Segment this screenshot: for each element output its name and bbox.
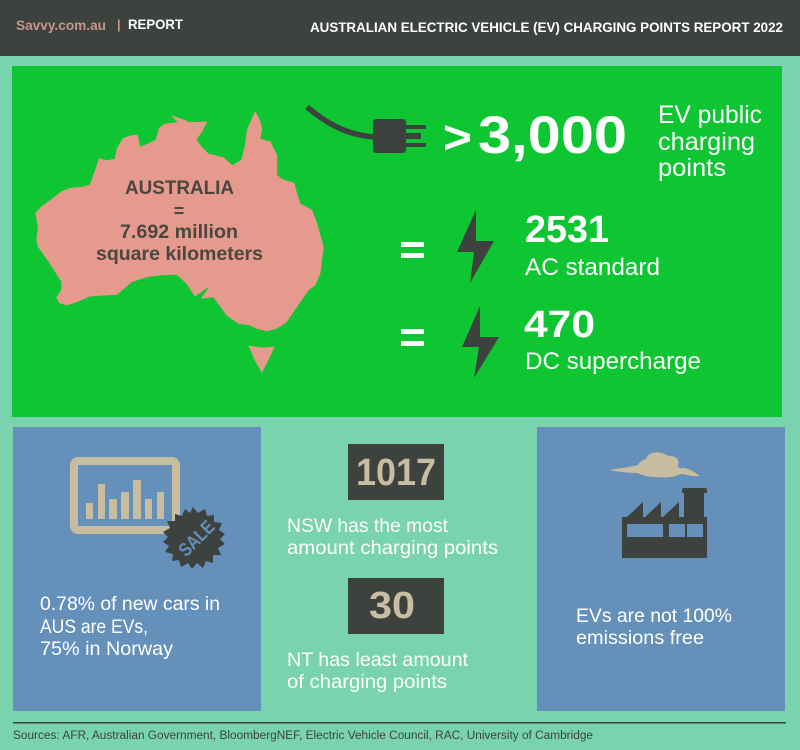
text: Australia area xyxy=(96,178,263,265)
text: EV public charging points: points xyxy=(658,154,726,182)
text: sources: Sources: AFR, Australian Government, BloombergNEF, Electric Vehicle Council, RAC, University of Cambridge xyxy=(13,730,593,742)
row: DC supercharge: 470 xyxy=(524,304,595,346)
header bar: AUSTRALIAN ELECTRIC VEHICLE (EV) CHARGING POINTS REPORT 2022 xyxy=(310,20,783,35)
panel: emissions xyxy=(537,427,785,711)
header bar: | xyxy=(117,17,121,32)
icon: chart on screen xyxy=(74,461,176,530)
stat: NT least charging points xyxy=(287,578,469,693)
stat: NSW most charging points xyxy=(287,444,498,559)
panel: charging points overview xyxy=(12,66,782,417)
stat: over 3,000: > xyxy=(443,111,472,163)
icon: factory xyxy=(622,488,707,558)
row: DC supercharge: DC supercharge xyxy=(525,348,701,375)
text: new car share xyxy=(40,593,220,660)
text: Australia area: square kilometers xyxy=(96,244,263,265)
text: EV public charging points xyxy=(658,101,762,182)
text: new car share: AUS are EVs, xyxy=(40,616,148,638)
header bar: Savvy.com.au xyxy=(16,17,106,33)
row: AC standard xyxy=(401,209,660,283)
icon: sale badge: SALE xyxy=(175,517,219,561)
row: AC standard: 2531 xyxy=(525,209,609,251)
text: new car share: 0.78% of new cars in xyxy=(40,593,220,615)
text: Australia area: 7.692 million xyxy=(120,222,238,243)
row: AC standard: AC standard xyxy=(525,254,660,281)
stat: NSW most charging points: amount charging points xyxy=(287,537,498,559)
text: emissions xyxy=(576,605,732,649)
stat: NSW most charging points: NSW has the most xyxy=(287,515,449,537)
stat: NSW most charging points: 1017 xyxy=(356,452,436,494)
text: Australia area: AUSTRALIA xyxy=(125,178,234,199)
icon: cloud xyxy=(610,452,700,477)
stat: NT least charging points: 30 xyxy=(369,585,415,627)
panel: new car share xyxy=(13,427,261,711)
text: emissions: EVs are not 100% xyxy=(576,605,732,627)
text: EV public charging points: charging xyxy=(658,128,755,156)
stat: over 3,000: 3,000 xyxy=(478,106,627,165)
text: EV public charging points: EV public xyxy=(658,101,762,129)
icon: sale badge xyxy=(163,507,225,569)
icon: plug and cable xyxy=(307,107,426,153)
row: DC supercharge xyxy=(401,304,701,378)
stat: NT least charging points: of charging points xyxy=(287,671,447,693)
header bar: REPORT xyxy=(128,16,183,32)
header bar xyxy=(0,0,800,56)
text: emissions: emissions free xyxy=(576,627,704,649)
text: new car share: 75% in Norway xyxy=(40,638,173,660)
map: Australia xyxy=(36,112,323,372)
stat: NT least charging points: NT has least amount xyxy=(287,649,469,671)
text: Australia area: = xyxy=(174,201,184,221)
